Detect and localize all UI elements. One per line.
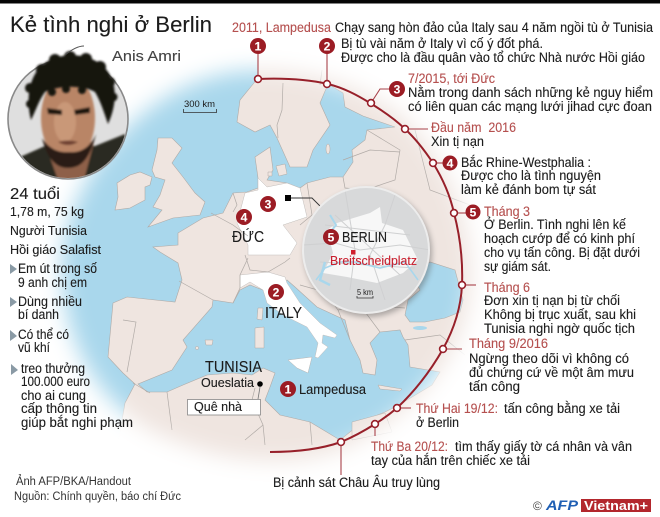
map labels: Lampedusa — [299, 382, 366, 397]
timeline text: Monday 19/12 — [416, 401, 620, 430]
bullet list: treo thưởng — [21, 361, 85, 376]
personal facts: Hồi giáo Salafist — [10, 242, 101, 257]
callout: Quê nhà: Quê nhà — [194, 399, 243, 414]
timeline text: Rhine-Westphalia — [461, 155, 601, 197]
Germany — [237, 178, 307, 255]
timeline text: 7/2015: Nằm trong danh sách những kẻ nguy hiểm — [408, 85, 653, 100]
personal facts: Người Tunisia — [10, 223, 88, 238]
bullet list: 100.000 euro — [21, 374, 90, 389]
Mediterranean sea — [138, 280, 440, 440]
personal facts: 1,78 m, 75 kg — [10, 204, 84, 219]
map labels: TUNISIA — [205, 359, 262, 376]
numbered badges: 4 — [241, 210, 248, 224]
logo: AFP Vietnam+: © — [533, 499, 542, 513]
numbered badges: 5 — [470, 206, 477, 220]
timeline text: June: Không bị trục xuất, sau khi — [484, 307, 636, 322]
portrait photo — [8, 46, 135, 185]
map labels: Oueslatia — [201, 376, 254, 390]
name: Anis Amri — [112, 48, 181, 65]
timeline text: Tuesday 20/12 — [371, 439, 632, 468]
numbered badges: 1 — [255, 40, 262, 54]
Berlin marker and leader — [285, 195, 320, 206]
bullet list: cấp thông tin — [21, 401, 97, 416]
bullet list: Em út trong số — [18, 261, 97, 276]
Oueslatia location dot — [257, 381, 263, 387]
Marmara — [413, 326, 427, 330]
Sicily — [288, 357, 312, 373]
bullet list: giúp bắt nghi phạm — [21, 415, 133, 430]
Black Sea — [405, 262, 463, 322]
timeline text: 2011: 2011, Lampedusa — [232, 20, 331, 35]
timeline text: Monday 19/12: ở Berlin — [416, 415, 459, 430]
timeline text: Tuesday 20/12: tay của hắn trên chiếc xe tải — [371, 453, 530, 468]
credits: Ảnh AFP/BKA/Handout — [16, 475, 132, 488]
timeline text: 7/2015 — [408, 71, 653, 114]
Berlin inset — [300, 185, 432, 317]
timeline text: September 2016: Tháng 9/2016 — [469, 336, 548, 351]
logo: AFP Vietnam+: AFP — [545, 497, 579, 513]
timeline text: June: Đơn xin tị nạn bị từ chối — [484, 293, 620, 308]
timeline text: March: cho vụ tấn công. Bị đặt dưới — [484, 245, 640, 260]
top bar — [0, 0, 660, 4]
timeline text: Tuesday 20/12: Thứ Ba 20/12: — [371, 439, 448, 454]
timeline text: March: Ở Berlin. Tình nghi lên kế — [484, 217, 626, 232]
timeline text: 7/2015: có liên quan các mạng lưới jihad cực đoan — [408, 99, 652, 114]
scale: 300 km: 300 km — [184, 99, 215, 110]
logo: AFP Vietnam+: Vietnam+ — [584, 498, 648, 513]
credits — [14, 475, 181, 503]
timeline text: June — [484, 280, 636, 336]
timeline text: March: Tháng 3 — [484, 204, 530, 219]
bullet list: bí danh — [18, 307, 59, 322]
timeline text: June: Tháng 6 — [484, 280, 530, 295]
islands — [195, 144, 402, 440]
timeline text: early 2016 — [431, 120, 516, 149]
numbered badges: 5 — [328, 230, 335, 244]
timeline text: Tuesday 20/12: tìm thấy giấy tờ cá nhân và vân — [455, 439, 632, 454]
timeline text: prison: Bị tù vài năm ở Italy vì cố ý đốt phá. — [341, 36, 543, 51]
arc timeline — [255, 54, 476, 475]
inset shadow — [304, 189, 432, 317]
timeline text: September 2016: Ngừng theo dõi vì không có — [469, 351, 629, 366]
numbered badges — [236, 38, 480, 397]
timeline rings — [255, 76, 465, 445]
timeline text: Rhine-Westphalia: Bắc Rhine-Westphalia : — [461, 155, 591, 170]
numbered badges: 1 — [285, 382, 292, 396]
UK — [148, 138, 205, 227]
logo: AFP Vietnam+ — [533, 497, 651, 513]
bullet list: Có thể có — [18, 327, 69, 342]
timeline text: Monday 19/12: Thứ Hai 19/12: — [416, 401, 498, 416]
map labels: ITALY — [265, 305, 302, 322]
timeline text: March — [484, 204, 640, 274]
personal facts: 24 tuổi — [10, 185, 60, 203]
timeline text: June: Tunisia nghi ngờ quốc tịch — [484, 321, 635, 336]
timeline text: early 2016: Đầu năm 2016 — [431, 120, 516, 135]
Italy — [240, 272, 337, 358]
credits: Nguồn: Chính quyền, báo chí Đức — [14, 491, 181, 503]
bullet list: Dùng nhiều — [18, 294, 82, 309]
timeline text: September 2016 — [469, 336, 634, 394]
timeline text: March: sự giám sát. — [484, 259, 551, 274]
title: Kẻ tình nghi ở Berlin — [10, 12, 212, 37]
Breitscheidplatz label: Breitscheidplatz — [330, 254, 417, 268]
timeline text: Rhine-Westphalia: Được cho là tình nguyện — [461, 168, 601, 183]
bullet list: cho ai cung — [21, 388, 86, 403]
timeline text: 7/2015: 7/2015, tới Đức — [408, 71, 495, 86]
land mass — [108, 58, 482, 472]
borders — [123, 70, 470, 445]
bullet list: vũ khí — [18, 340, 50, 355]
timeline text: prison — [341, 36, 645, 65]
numbered badges: 4 — [447, 156, 454, 170]
numbered badges: 2 — [273, 286, 280, 300]
Ireland — [115, 172, 152, 210]
inset disc — [302, 186, 430, 314]
personal facts — [10, 185, 101, 257]
hair — [25, 51, 118, 124]
Berlin label: BERLIN — [342, 230, 387, 246]
numbered badges: 2 — [324, 40, 331, 54]
callout: Quê nhà — [188, 387, 260, 415]
timeline text: early 2016: Xin tị nạn — [431, 134, 484, 149]
timeline text: Monday 19/12: tấn công bằng xe tải — [504, 401, 620, 416]
connectors — [258, 54, 476, 475]
bullet list: 9 anh chị em — [18, 275, 87, 290]
timeline text: prison: Được cho là đầu quân vào tổ chức Nhà nước Hồi giáo — [341, 50, 645, 65]
bullet markers — [10, 264, 18, 375]
numbered badges: 3 — [394, 82, 401, 96]
bullet list — [10, 261, 133, 430]
timeline text: September 2016: tấn công — [469, 379, 520, 394]
map of Europe and North Africa — [48, 58, 477, 467]
sea — [48, 58, 394, 424]
timeline text: September 2016: đủ chứng cứ về một âm mưu — [469, 365, 634, 380]
timeline curve — [258, 79, 462, 452]
numbered badges: 3 — [265, 198, 272, 212]
Breitscheidplatz marker — [351, 250, 356, 254]
timeline text: Rhine-Westphalia: làm kẻ đánh bom tự sát — [461, 182, 596, 197]
timeline text: wanted: Bị cảnh sát Châu Âu truy lùng — [273, 475, 440, 490]
timeline text: March: hoạch cướp để có kinh phí — [484, 231, 635, 246]
map labels: ĐỨC — [232, 229, 264, 246]
map labels — [201, 229, 366, 397]
scale: 5 km: 5 km — [357, 287, 373, 297]
